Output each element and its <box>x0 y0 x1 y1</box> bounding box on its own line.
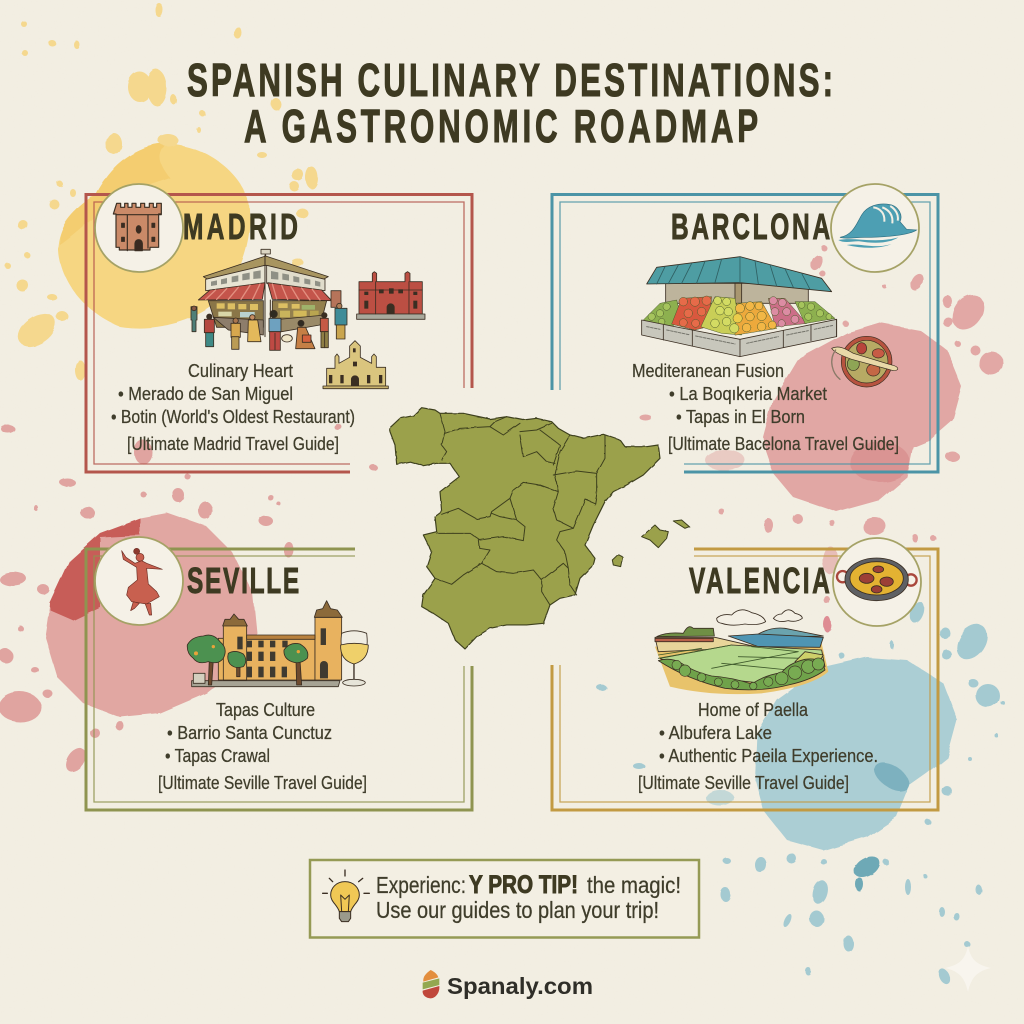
Madrid text block <box>111 361 355 454</box>
Barcelona frame <box>552 194 938 472</box>
Madrid icon badge: castle tower <box>95 184 183 272</box>
Barcelona text block: [Ultimate Bacelona Travel Guide] <box>668 434 899 454</box>
blue watercolor stain and splatter, Valencia <box>597 600 1005 985</box>
illustration: Seville palace with orange trees <box>187 601 342 687</box>
logo mark <box>423 970 439 998</box>
Valencia text block: • Authentic Paeila Experience. <box>659 746 878 766</box>
heading: Seville: SEVILLE <box>187 560 299 601</box>
region borders <box>435 413 605 605</box>
Madrid text block: • Botin (World's Oldest Restaurant) <box>111 407 355 427</box>
Seville icon badge: flamenco dancer <box>95 537 183 625</box>
illustration: Boqueria fruit market stall <box>642 257 837 357</box>
map of Spain <box>389 408 689 649</box>
Seville text block: [Ultimate Seville Travel Guide] <box>158 773 367 793</box>
Valencia text block: Home of Paella <box>698 700 809 720</box>
Barcelona text block: • Tapas in El Born <box>676 407 805 427</box>
illustration: glass of white wine <box>341 631 368 686</box>
pro tip callout <box>310 860 699 938</box>
mainland Spain <box>389 408 660 649</box>
red watercolor stain and splatter, Seville <box>0 424 377 775</box>
Barcelona text block: • La Boqıkeria Market <box>669 384 827 404</box>
Madrid text block: • Merado de San Miguel <box>118 384 293 404</box>
tip text <box>376 871 681 923</box>
tip text: Y PRO TIP! <box>469 871 578 899</box>
panel: Seville <box>86 537 472 810</box>
panel: Madrid <box>86 184 472 472</box>
Barcelona icon badge: wave <box>831 184 919 272</box>
Seville text block <box>158 700 367 793</box>
Valencia text block: [Ultimate Seville Travel Guide] <box>638 773 849 793</box>
illustration: San Miguel market <box>191 249 347 350</box>
Valencia text block <box>638 700 878 793</box>
icon: light bulb <box>323 870 369 922</box>
illustration: tapas plate <box>832 336 898 387</box>
Valencia icon badge: paella pan <box>833 538 921 626</box>
logo: Spanaly.com: Spanaly.com <box>447 973 593 999</box>
title: A GASTRONOMIC ROADMAP <box>244 101 758 153</box>
heading: Valencia: VALENCIA <box>689 560 830 601</box>
tip text: Use our guides to plan your trip! <box>376 897 659 923</box>
panel: Barcelona <box>552 184 938 472</box>
Seville text block: • Barrio Santa Cunctuz <box>167 723 332 743</box>
illustration: Albufera lake and rice fields <box>655 610 828 694</box>
Valencia text block: • Albufera Lake <box>659 723 772 743</box>
tip text: Experienc: <box>376 872 466 898</box>
title <box>187 55 833 153</box>
Valencia frame <box>552 549 938 810</box>
yellow watercolor stain and splatter <box>5 3 318 380</box>
heading: Barcelona: BARCLONA <box>671 206 830 247</box>
Seville text block: • Tapas Crawal <box>165 746 270 766</box>
Madrid frame <box>86 194 472 472</box>
Balearic Islands <box>612 520 689 567</box>
red watercolor stain and splatter, Barcelona <box>639 244 1003 633</box>
Barcelona text block: Mediteranean Fusion <box>632 361 784 381</box>
title: SPANISH CULINARY DESTINATIONS: <box>187 55 833 107</box>
tip text: the magic! <box>587 872 681 898</box>
market shoppers <box>191 303 347 350</box>
heading: Madrid: MADRID <box>183 206 298 247</box>
Barcelona text block <box>632 361 899 454</box>
illustration: baroque church <box>323 341 388 389</box>
Madrid text block: Culinary Heart <box>188 361 293 381</box>
Seville frame <box>86 549 472 810</box>
panel: Valencia <box>552 538 938 810</box>
Madrid text block: [Ultimate Madrid Travel Guide] <box>127 434 339 454</box>
illustration: red brick palace <box>357 272 425 319</box>
Seville text block: Tapas Culture <box>216 700 315 720</box>
sparkle watermark <box>945 946 991 992</box>
